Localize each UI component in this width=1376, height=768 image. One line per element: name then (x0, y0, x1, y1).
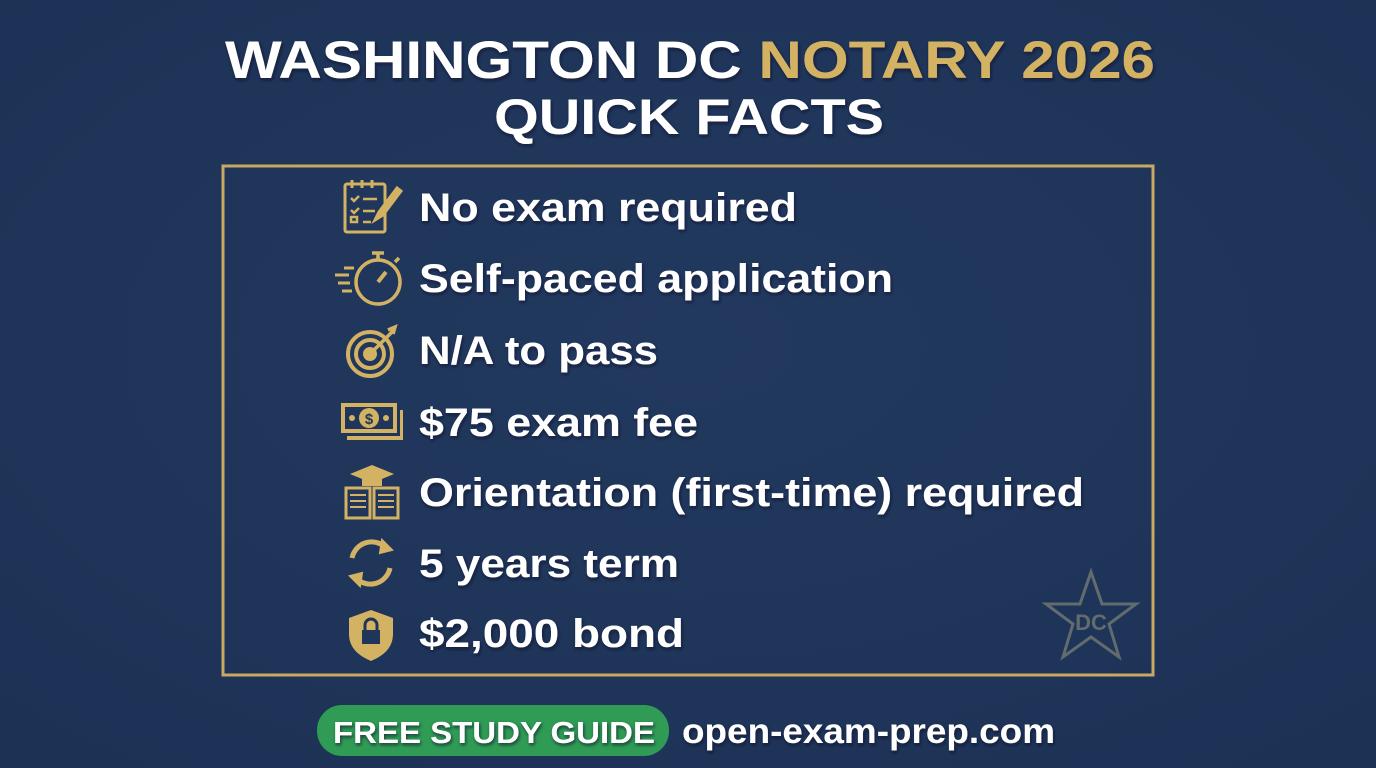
fact texts (419, 186, 1084, 656)
fact texts: Orientation (first-time) required (419, 471, 1084, 515)
footer url: open-exam-prep.com (682, 712, 1055, 751)
icon: shield lock (349, 610, 393, 661)
icon: DC star watermark: DC (1075, 610, 1107, 635)
footer badge (317, 705, 669, 756)
fact texts: $75 exam fee (419, 401, 698, 445)
icon: money: $ (365, 411, 374, 428)
icon: checklist (345, 180, 401, 232)
icon: graduation book (346, 465, 398, 518)
icon: money (341, 403, 403, 440)
fact texts: 5 years term (419, 542, 679, 586)
icon: target (348, 327, 395, 376)
fact texts: N/A to pass (419, 329, 658, 373)
icon: renew arrows (350, 540, 392, 586)
fact texts: $2,000 bond (419, 612, 684, 656)
title: QUICK FACTS (494, 89, 884, 145)
footer badge: FREE STUDY GUIDE (333, 715, 655, 750)
icon: DC star watermark (1046, 572, 1136, 657)
panel: quick facts (223, 166, 1153, 675)
title (225, 31, 1155, 145)
fact texts: No exam required (419, 186, 797, 230)
icon: stopwatch (335, 253, 400, 304)
fact texts: Self-paced application (419, 257, 893, 301)
title: WASHINGTON DC NOTARY 2026 (225, 31, 1155, 90)
